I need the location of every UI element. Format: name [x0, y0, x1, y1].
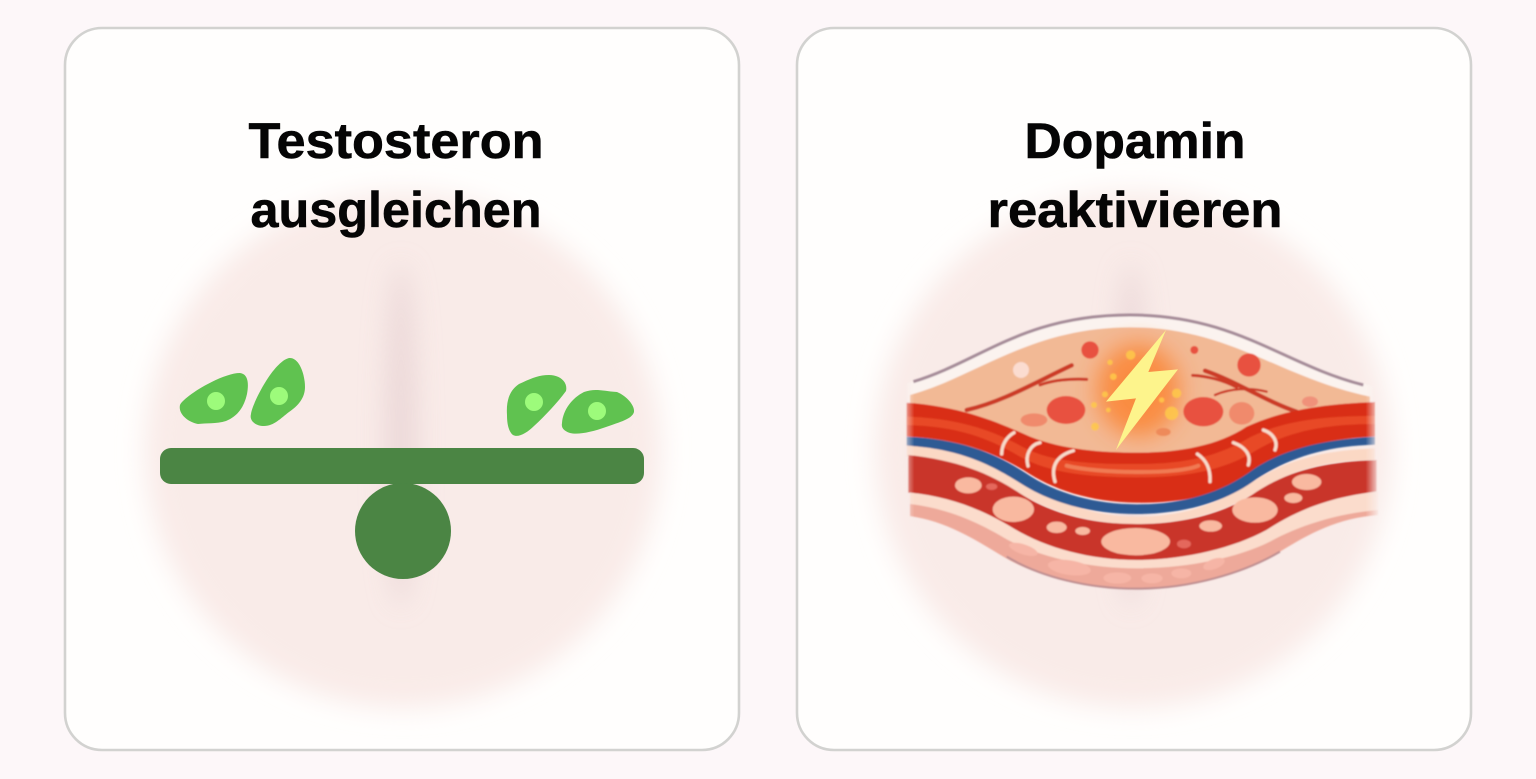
illustration: blood vessel with lightning bolt: [907, 314, 1378, 589]
panel: Dopamin reaktivieren: [797, 28, 1471, 750]
pale stripe under blue vein: [907, 445, 1375, 524]
tissue bubbles: [1013, 341, 1318, 436]
balance pivot: [355, 483, 451, 579]
branches: [967, 365, 1297, 412]
artery: [907, 402, 1375, 503]
background glow: [875, 192, 1391, 708]
bottom skin layer: [910, 504, 1378, 588]
heading: Testosteron ausgleichen: ausgleichen: [250, 182, 542, 238]
fatty tissue: [910, 327, 1370, 467]
heading: Dopamin reaktivieren: reaktivieren: [988, 182, 1282, 238]
cell 2: [251, 358, 305, 426]
heading: Testosteron ausgleichen: [248, 113, 544, 238]
cell 3: [507, 375, 566, 436]
lightning bolt: [1106, 330, 1178, 450]
artery rings: [1002, 430, 1276, 482]
cell 1: [180, 373, 248, 424]
icon: balance scale with cells: [160, 358, 644, 579]
heading: Dopamin reaktivieren: Dopamin: [1024, 113, 1246, 169]
heading: Testosteron ausgleichen: Testosteron: [248, 113, 544, 169]
lower red layer: [908, 455, 1377, 560]
heading: Dopamin reaktivieren: [988, 113, 1282, 238]
pale cells: [955, 474, 1321, 555]
lower pale band: [910, 492, 1378, 574]
blue vein: [907, 437, 1375, 514]
panel: Testosteron ausgleichen: [65, 28, 739, 750]
background glow: [145, 192, 661, 708]
outer top membrane: [907, 314, 1373, 403]
cell 4: [562, 390, 634, 434]
sparks: [1091, 350, 1181, 431]
balance beam: [160, 448, 644, 484]
glow behind bolt: [1097, 343, 1180, 437]
